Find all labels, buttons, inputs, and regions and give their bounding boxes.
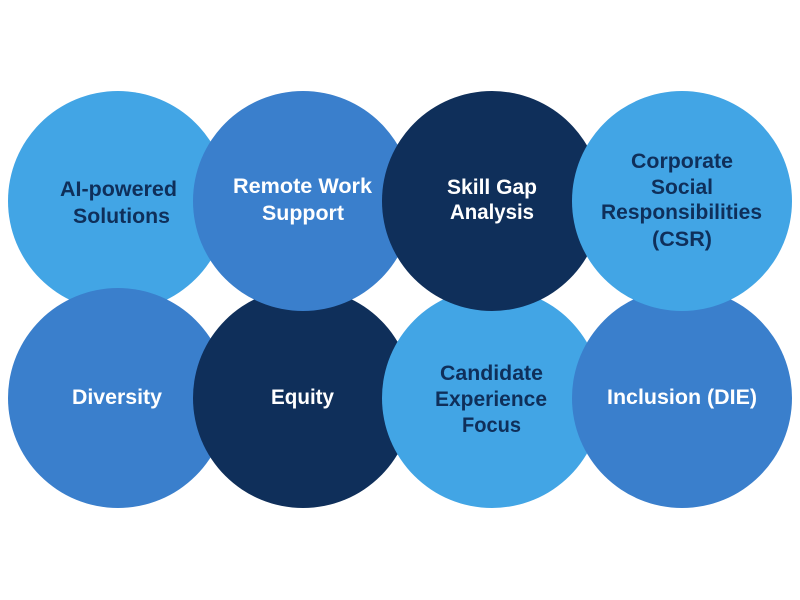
label: Corporate Social Responsibilities (CSR): Social (651, 176, 713, 199)
label: Candidate Experience Focus (435, 362, 547, 437)
circle: Diversity (8, 288, 228, 508)
label: Remote Work Support (233, 175, 372, 225)
circle: Candidate Experience Focus (382, 288, 602, 508)
label: Corporate Social Responsibilities (CSR): (CSR) (652, 228, 712, 251)
label: AI-powered Solutions (60, 178, 177, 228)
label: Remote Work Support: Support (262, 202, 344, 225)
label: Corporate Social Responsibilities (CSR): Responsibilities (601, 201, 762, 224)
label: Diversity: Diversity (72, 386, 162, 409)
circle: Skill Gap Analysis (382, 91, 602, 311)
label: Candidate Experience Focus: Candidate (440, 362, 543, 385)
label: Skill Gap Analysis: Skill Gap (447, 176, 537, 199)
label: Inclusion (DIE): Inclusion (DIE) (607, 386, 757, 409)
label: Candidate Experience Focus: Experience (435, 388, 547, 411)
label: AI-powered Solutions: Solutions (73, 205, 170, 228)
label: Equity: Equity (271, 386, 334, 409)
label: Candidate Experience Focus: Focus (462, 414, 521, 437)
label: Remote Work Support: Remote Work (233, 175, 372, 198)
label: Corporate Social Responsibilities (CSR): Corporate (631, 150, 733, 173)
label: AI-powered Solutions: AI-powered (60, 178, 177, 201)
circle: Equity (193, 288, 413, 508)
circle: AI-powered Solutions (8, 91, 228, 311)
label: Skill Gap Analysis (447, 176, 537, 224)
label: Corporate Social Responsibilities (CSR) (601, 150, 762, 251)
circle: Inclusion (DIE) (572, 288, 792, 508)
circle: Remote Work Support (193, 91, 413, 311)
circle: Corporate Social Responsibilities (CSR) (572, 91, 792, 311)
label: Skill Gap Analysis: Analysis (450, 201, 534, 224)
